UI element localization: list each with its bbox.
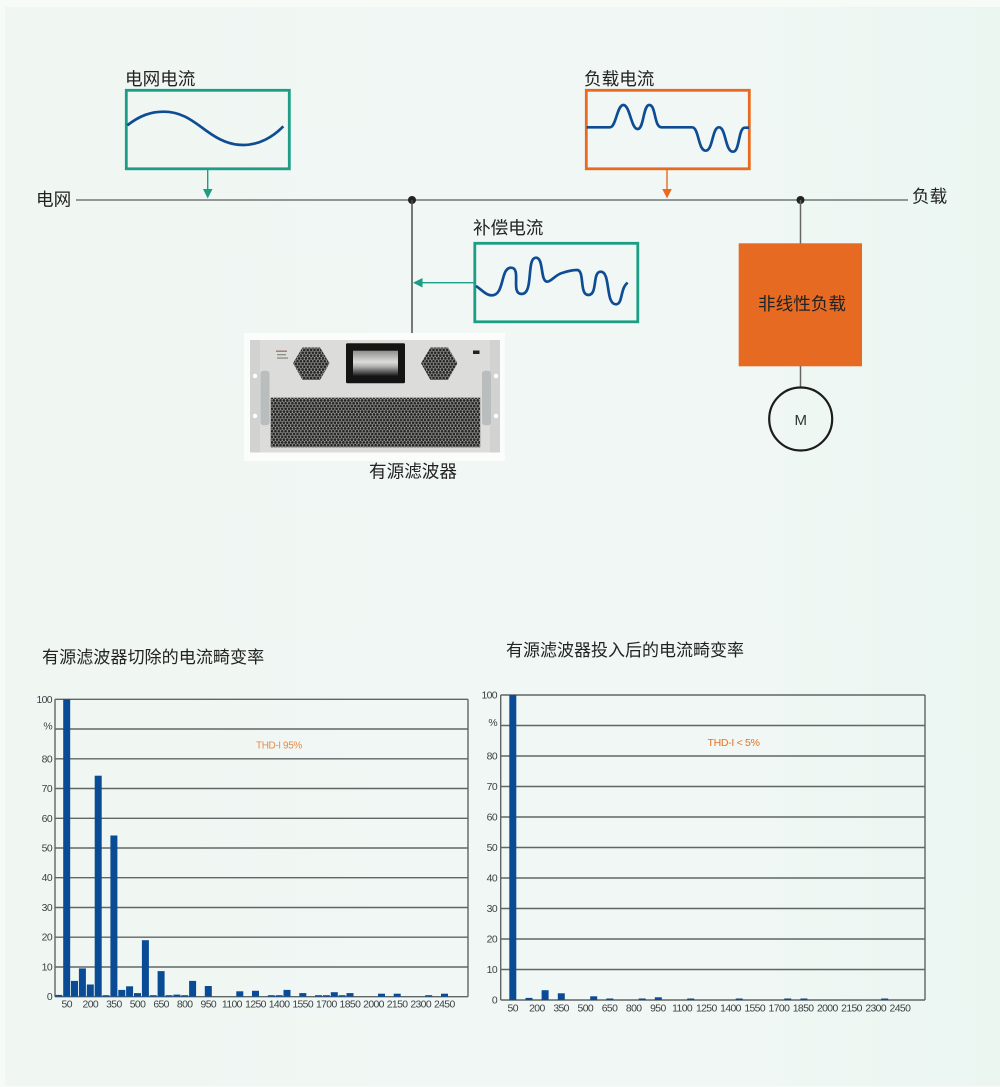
device: active power filter — [244, 333, 505, 461]
x axis labels: 2450 — [890, 1004, 911, 1014]
y axis labels: 0 — [492, 996, 498, 1006]
x axis labels: 2000 — [817, 1004, 838, 1014]
y axis labels: 20 — [42, 933, 53, 944]
x axis labels: 50 — [508, 1004, 519, 1014]
y axis labels: 10 — [487, 965, 498, 976]
junction dot: load branch — [796, 196, 804, 204]
x axis labels: 200 — [529, 1004, 545, 1014]
right handle — [482, 371, 491, 425]
x axis labels: 1400 — [269, 1000, 290, 1010]
x axis labels: 2150 — [387, 1000, 408, 1010]
junction dot: filter branch — [408, 196, 416, 204]
label: load: 负载 — [912, 186, 947, 206]
panel: load current — [584, 69, 749, 169]
x axis labels: 1550 — [744, 1004, 766, 1014]
x axis labels: 2300 — [865, 1004, 887, 1014]
panel: compensation current: 补偿电流 — [473, 218, 543, 238]
title: chart after: 有源滤波器投入后的电流畸变率 — [506, 641, 744, 660]
y axis labels: % — [43, 722, 52, 732]
x axis labels: 350 — [106, 1000, 122, 1010]
panel: grid current: 电网电流 — [125, 69, 195, 89]
y axis labels: 40 — [42, 873, 53, 884]
x axis labels: 1100 — [222, 1000, 243, 1010]
y axis labels: 50 — [42, 844, 53, 854]
y axis labels: 60 — [487, 812, 498, 824]
x axis labels: 1850 — [340, 1000, 361, 1010]
block: nonlinear load: 非线性负载 — [758, 294, 846, 314]
y axis labels: 100 — [481, 690, 498, 702]
x axis labels: 1850 — [793, 1004, 814, 1014]
load branch line — [800, 200, 802, 244]
left handle — [260, 371, 270, 425]
label: active power filter: 有源滤波器 — [369, 462, 457, 482]
y axis labels — [481, 690, 498, 1006]
x axis labels: 1700 — [769, 1004, 790, 1014]
y axis labels: 100 — [36, 695, 53, 706]
x axis labels: 1250 — [245, 1000, 267, 1010]
main bus line — [76, 199, 908, 201]
bars — [55, 699, 448, 997]
chart: after filter — [481, 690, 925, 1014]
y axis labels: % — [488, 718, 497, 729]
x axis labels: 650 — [153, 1000, 170, 1010]
x axis labels: 2000 — [363, 1000, 385, 1010]
x axis labels — [62, 1000, 455, 1010]
arrow: load current — [662, 169, 672, 198]
y axis labels: 30 — [42, 903, 53, 914]
arrow: grid current — [203, 169, 212, 198]
panel: grid current — [125, 69, 289, 169]
label: grid: 电网 — [36, 190, 71, 210]
x axis labels: 950 — [650, 1004, 666, 1014]
x axis labels: 1550 — [292, 1000, 314, 1010]
arrow: compensation current — [413, 278, 474, 288]
y axis labels: 40 — [487, 874, 498, 884]
x axis labels: 1400 — [720, 1004, 742, 1014]
large vent — [271, 398, 480, 447]
x axis labels: 2300 — [410, 1000, 432, 1010]
y axis labels: 70 — [42, 784, 53, 795]
panel: load current: 负载电流 — [584, 69, 654, 89]
chart: before filter — [36, 695, 468, 1010]
screen — [346, 343, 405, 383]
y axis labels: 70 — [487, 782, 498, 793]
x axis labels — [508, 1004, 911, 1014]
x axis labels: 2450 — [434, 1000, 455, 1010]
title: chart before: 有源滤波器切除的电流畸变率 — [42, 648, 264, 667]
left vent — [293, 348, 330, 380]
motor connector — [800, 366, 802, 388]
x axis labels: 1250 — [696, 1004, 717, 1014]
y axis labels: 20 — [487, 934, 498, 946]
x axis labels: 50 — [62, 1000, 73, 1010]
y axis labels — [36, 695, 53, 1003]
x axis labels: 1700 — [316, 1000, 337, 1010]
y axis labels: 30 — [487, 904, 498, 915]
y axis labels: 50 — [487, 843, 498, 854]
bars — [509, 695, 888, 1000]
panel: compensation current — [473, 218, 638, 322]
right vent — [421, 348, 458, 380]
x axis labels: 2150 — [841, 1004, 863, 1014]
x axis labels: 200 — [83, 1000, 99, 1010]
motor — [769, 388, 832, 450]
y axis labels: 0 — [47, 992, 53, 1003]
y axis labels: 80 — [42, 754, 53, 765]
filter branch line — [411, 200, 413, 334]
x axis labels: 800 — [177, 1000, 193, 1010]
THD annotation: THD-I 95% — [256, 740, 302, 752]
x axis labels: 800 — [626, 1004, 642, 1014]
x axis labels: 950 — [201, 1000, 217, 1010]
THD annotation: THD-I < 5% — [708, 737, 760, 749]
x axis labels: 500 — [578, 1004, 594, 1014]
x axis labels: 500 — [130, 1000, 146, 1010]
block: nonlinear load — [739, 243, 862, 366]
x axis labels: 350 — [553, 1004, 570, 1014]
x axis labels: 1100 — [672, 1004, 693, 1014]
motor: M — [794, 412, 807, 429]
y axis labels: 60 — [42, 814, 53, 825]
y axis labels: 10 — [42, 962, 53, 974]
x axis labels: 650 — [602, 1004, 618, 1014]
y axis labels: 80 — [487, 752, 498, 762]
